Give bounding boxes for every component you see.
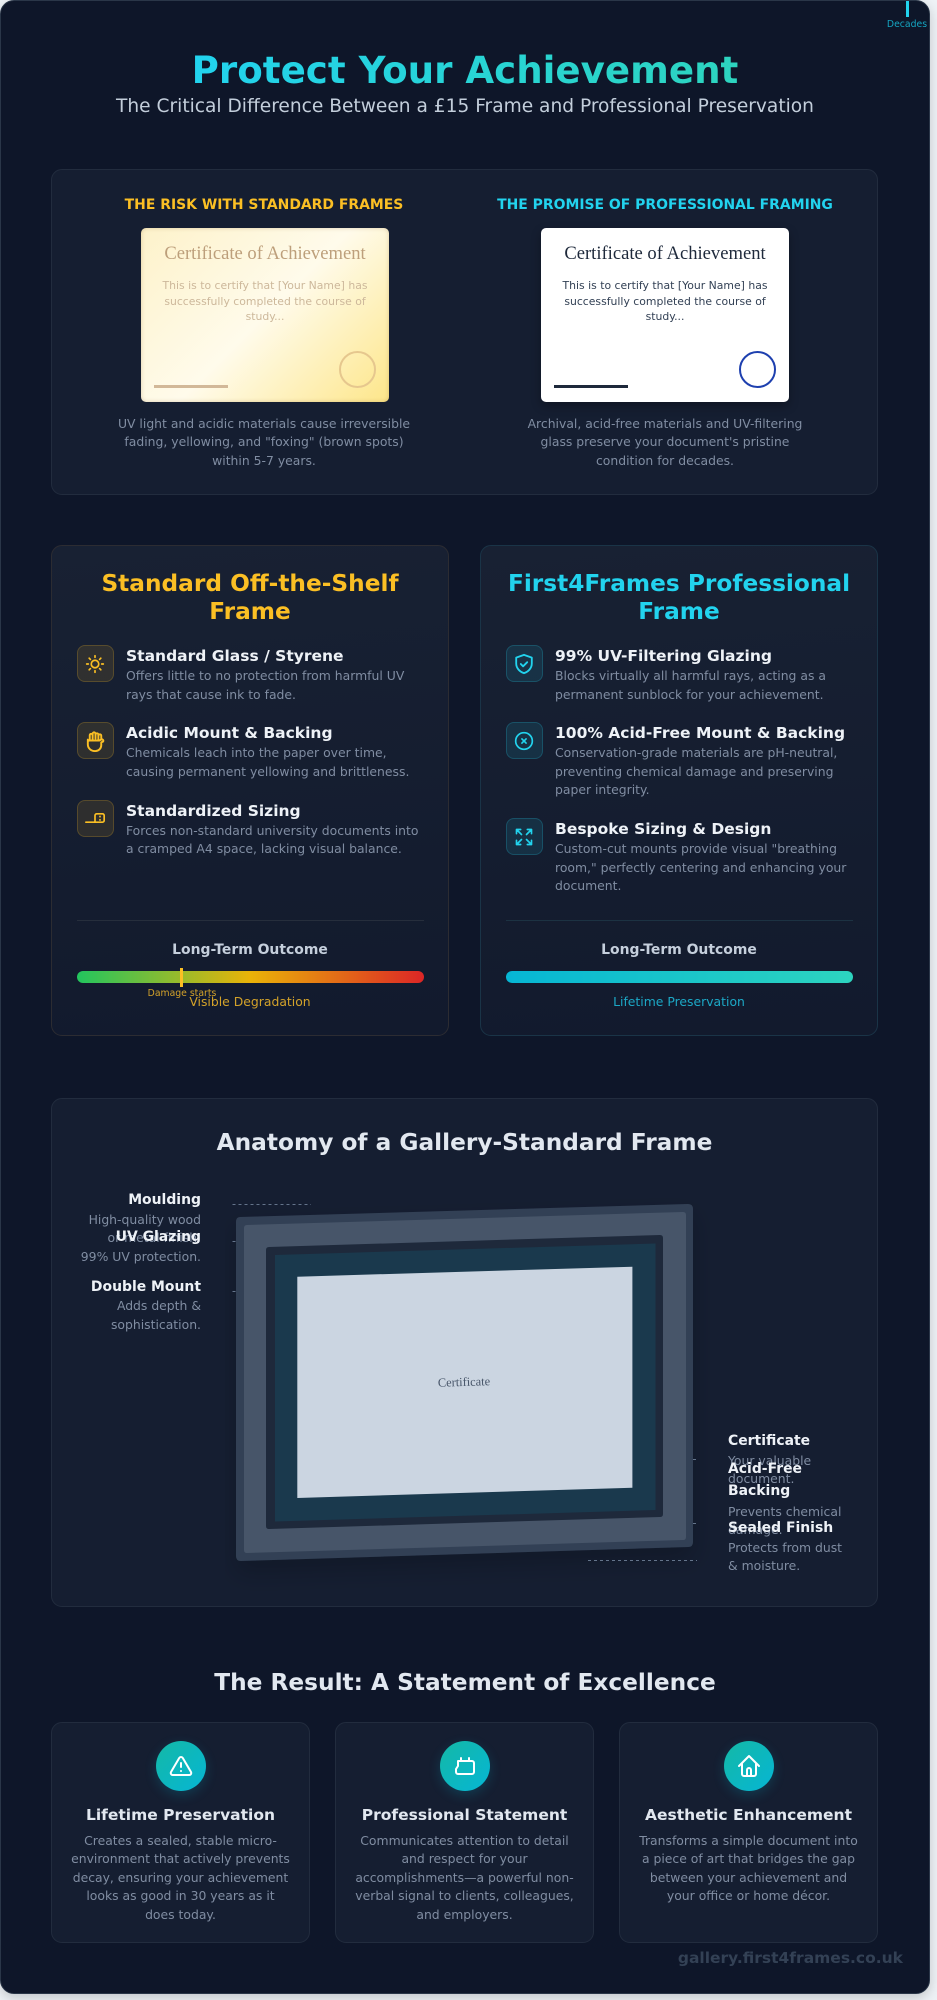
item text — [555, 820, 846, 893]
heading: standard frame: Frame — [209, 598, 291, 625]
title: Protect Your Achievement — [192, 48, 738, 92]
preservation bar — [506, 971, 852, 983]
item text: paper integrity. — [555, 782, 650, 797]
label: acid-free backing: damage. — [728, 1522, 783, 1537]
item text — [555, 724, 845, 797]
faded certificate — [141, 228, 389, 402]
icon: hand — [76, 722, 114, 759]
frame: moulding outer — [236, 1204, 693, 1561]
item text: 99% UV-Filtering Glazing — [555, 647, 772, 665]
frame: rim — [266, 1235, 663, 1529]
heading: promise: THE PROMISE OF PROFESSIONAL FRAMING — [497, 197, 833, 213]
caption: promise — [528, 416, 802, 468]
outcome label: Long-Term Outcome — [601, 942, 757, 958]
degradation bar — [76, 971, 424, 983]
label: moulding: or metal finish. — [108, 1230, 201, 1245]
item text — [126, 724, 409, 779]
frame: certificate paper — [297, 1267, 632, 1498]
card: lifetime preservation — [51, 1722, 310, 1943]
marker: decades — [887, 1, 927, 30]
pristine certificate: successfully completed the course of — [564, 294, 766, 308]
item text: Conservation-grade materials are pH-neutral, — [555, 745, 837, 760]
item text: document. — [555, 878, 621, 893]
heading: standard frame: Standard Off-the-Shelf — [101, 570, 399, 597]
pristine certificate: study... — [646, 310, 684, 323]
caption: risk: UV light and acidic materials cause irreversible — [118, 416, 410, 430]
heading: risk: THE RISK WITH STANDARD FRAMES — [125, 197, 403, 213]
card text: verbal signal to clients, colleagues, — [355, 1888, 574, 1903]
card: aesthetic enhancement — [619, 1722, 878, 1943]
card text: decay, ensuring your achievement — [73, 1870, 288, 1885]
card title: Professional Statement — [362, 1806, 567, 1824]
item text: causing permanent yellowing and brittleness. — [126, 764, 409, 779]
heading: professional frame: Frame — [638, 598, 720, 625]
pristine certificate: This is to certify that [Your Name] has — [562, 279, 768, 292]
label: moulding: High-quality wood — [89, 1212, 201, 1226]
card text: Transforms a simple document into — [639, 1832, 858, 1848]
card text — [355, 1832, 574, 1922]
label: acid-free backing: Prevents chemical — [728, 1504, 841, 1518]
item text: Chemicals leach into the paper over time, — [126, 745, 387, 760]
item: bespoke sizing — [506, 818, 846, 893]
heading: anatomy: Anatomy of a Gallery-Standard Frame — [217, 1129, 712, 1156]
label: certificate: Certificate — [728, 1433, 810, 1449]
label: moulding: Moulding — [128, 1192, 201, 1208]
item: standard glass — [77, 645, 404, 702]
caption: risk — [118, 416, 410, 468]
item text — [126, 802, 418, 856]
card: professional statement — [335, 1722, 594, 1943]
item text: Standardized Sizing — [126, 802, 301, 820]
item text: Bespoke Sizing & Design — [555, 820, 771, 838]
label: double mount: Adds depth & — [117, 1298, 201, 1313]
card title: Aesthetic Enhancement — [645, 1806, 852, 1824]
label: acid-free backing — [728, 1461, 841, 1537]
item text: Blocks virtually all harmful rays, acting as a — [555, 668, 826, 683]
card text — [71, 1832, 290, 1922]
caption: promise: Archival, acid-free materials and UV-filtering — [528, 416, 802, 430]
label: double mount: sophistication. — [111, 1317, 201, 1332]
item text — [555, 647, 826, 702]
item text: preventing chemical damage and preserving — [555, 764, 833, 779]
faded certificate: study... — [246, 310, 284, 323]
label: acid-free backing: Backing — [728, 1483, 790, 1499]
card text: between your achievement and — [650, 1870, 847, 1885]
label: sealed finish: Protects from dust — [728, 1540, 842, 1554]
outcome caption: Visible Degradation — [189, 994, 311, 1008]
frame: certificate text: Certificate — [438, 1374, 491, 1390]
label: sealed finish: & moisture. — [728, 1558, 800, 1573]
card text: accomplishments—a powerful non- — [355, 1870, 574, 1885]
label: sealed finish — [728, 1520, 842, 1573]
item text: Custom-cut mounts provide visual "breathing — [555, 841, 837, 856]
label: moulding — [89, 1192, 201, 1245]
damage marker — [180, 968, 183, 987]
frame: moulding inner — [244, 1212, 686, 1553]
card text: and employers. — [416, 1907, 513, 1922]
card text: Creates a sealed, stable micro- — [84, 1832, 277, 1848]
item text: 100% Acid-Free Mount & Backing — [555, 724, 845, 742]
item text: permanent sunblock for your achievement. — [555, 687, 824, 702]
label: uv glazing: UV Glazing — [116, 1229, 201, 1245]
caption: promise: glass preserve your document's pristine — [541, 434, 789, 449]
icon: sun — [76, 645, 114, 682]
outcome label: Long-Term Outcome — [172, 942, 328, 958]
label: certificate — [728, 1433, 811, 1486]
item: acidic mount — [77, 722, 409, 779]
caption: risk: fading, yellowing, and "foxing" (brown spots) — [124, 434, 404, 449]
panel: before and after comparison — [51, 169, 878, 495]
card text: environment that actively prevents — [71, 1851, 290, 1866]
heading: standard frame — [101, 570, 399, 625]
item text: Offers little to no protection from harmful UV — [126, 668, 404, 683]
card title: Lifetime Preservation — [86, 1806, 275, 1824]
marker label: Damage starts — [148, 988, 216, 998]
label: certificate: Your valuable — [728, 1452, 811, 1468]
marker: decades: Decades — [887, 19, 927, 30]
icon: expand arrows — [506, 818, 542, 855]
card text: Communicates attention to detail — [360, 1832, 569, 1848]
panel: professional frame — [480, 545, 878, 1036]
subtitle: The Critical Difference Between a £15 Frame and Professional Preservation — [116, 96, 814, 117]
caption: risk: within 5-7 years. — [212, 453, 316, 468]
item text: room," perfectly centering and enhancing your — [555, 860, 846, 875]
card text: a piece of art that bridges the gap — [642, 1851, 855, 1866]
icon: home — [724, 1741, 774, 1791]
item text: a cramped A4 space, lacking visual balance. — [126, 841, 402, 856]
heading: professional frame: First4Frames Professional — [508, 570, 850, 597]
pristine certificate: Certificate of Achievement — [564, 243, 766, 264]
watermark: gallery.first4frames.co.uk — [678, 1949, 903, 1967]
label: certificate: document. — [728, 1471, 794, 1486]
card text: does today. — [145, 1907, 216, 1922]
frame: double mount — [275, 1244, 656, 1522]
caption: promise: condition for decades. — [596, 453, 734, 468]
item text: rays that cause ink to fade. — [126, 687, 296, 702]
icon: shield check — [506, 645, 542, 682]
item text — [126, 647, 404, 702]
card text: looks as good in 30 years as it — [86, 1888, 275, 1903]
icon: circle x — [506, 722, 542, 759]
panel: anatomy of a frame — [51, 1098, 878, 1607]
label: acid-free backing: Acid-Free — [728, 1461, 802, 1477]
faded certificate: Certificate of Achievement — [164, 243, 366, 264]
heading: the result: The Result: A Statement of Excellence — [214, 1669, 716, 1696]
label: double mount — [91, 1278, 201, 1332]
frame diagram — [236, 1204, 693, 1561]
item: uv glazing — [506, 645, 826, 702]
item text: Standard Glass / Styrene — [126, 647, 344, 665]
label: sealed finish: Sealed Finish — [728, 1520, 833, 1536]
item text: Forces non-standard university documents into — [126, 822, 418, 838]
item: acid-free mount — [506, 722, 845, 797]
pristine certificate — [541, 228, 789, 402]
card text: your office or home décor. — [667, 1888, 830, 1903]
item text: Acidic Mount & Backing — [126, 724, 333, 742]
item: standardized sizing — [77, 800, 418, 856]
leader lines — [232, 1204, 697, 1561]
label: uv glazing: 99% UV protection. — [81, 1248, 201, 1264]
label: uv glazing — [81, 1229, 201, 1264]
outcome caption: Lifetime Preservation — [613, 994, 745, 1008]
faded certificate: successfully completed the course of — [164, 294, 366, 308]
faded certificate: This is to certify that [Your Name] has — [162, 279, 368, 292]
label: double mount: Double Mount — [91, 1278, 201, 1294]
card text — [639, 1832, 858, 1903]
panel: standard frame — [51, 545, 449, 1036]
card text: and respect for your — [401, 1851, 528, 1866]
icon: briefcase — [440, 1741, 490, 1791]
icon: warning triangle — [156, 1741, 206, 1791]
heading: professional frame — [508, 570, 850, 625]
icon: tape measure — [76, 800, 114, 836]
